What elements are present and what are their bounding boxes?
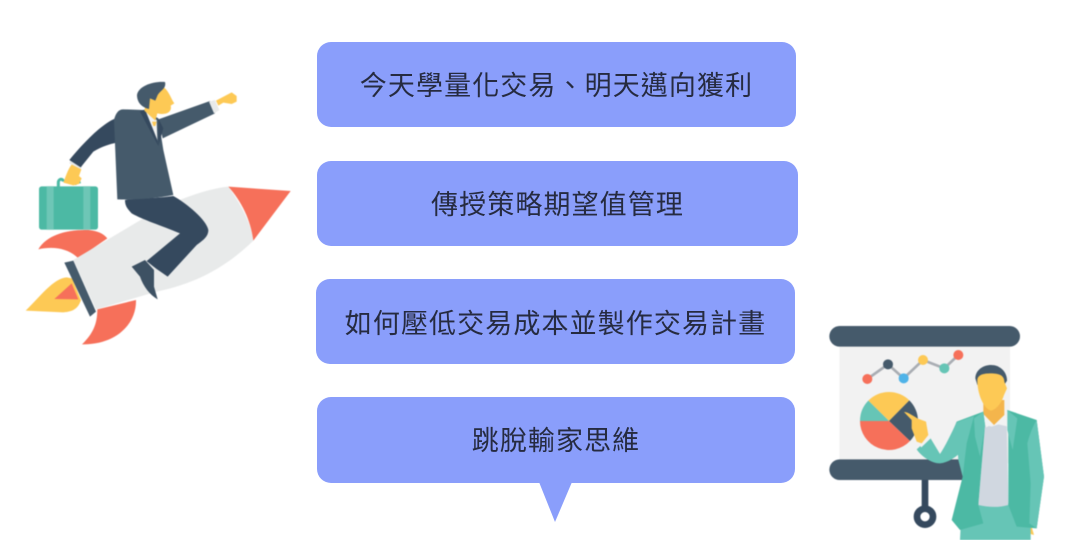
panel: item 1: [317, 42, 796, 127]
text: item 1 heading: 今天學量化交易、明天邁向獲利: [360, 71, 753, 101]
text: item 2 heading: 傳授策略期望值管理: [431, 190, 684, 220]
text: item 3 heading: 如何壓低交易成本並製作交易計畫: [345, 309, 766, 339]
panel: item 4 speech bubble: [317, 397, 795, 483]
panel: item 3: [316, 279, 795, 364]
panel: item 2: [317, 161, 798, 246]
text: item 4 heading: 跳脫輸家思維: [472, 426, 640, 456]
